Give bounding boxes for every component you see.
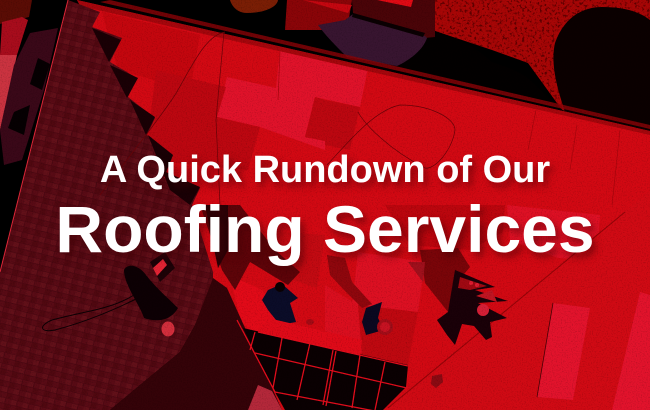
small dark stain near ridge xyxy=(431,374,443,388)
roof eave along top edge xyxy=(77,0,650,135)
worker shadow xyxy=(327,255,372,308)
lower right roof section across the ridge xyxy=(385,190,650,410)
worker in blue xyxy=(262,282,314,330)
pink panel below skylight xyxy=(248,385,282,410)
title line one: A Quick Rundown of Our xyxy=(100,149,550,191)
worker and shadow on shingles xyxy=(43,252,178,336)
seams on roof xyxy=(278,52,620,205)
mottled ground right of shed xyxy=(352,0,435,38)
neighbouring orange tree xyxy=(230,0,278,13)
dark valley lower section xyxy=(110,278,282,410)
left yard patches xyxy=(0,0,58,165)
roof lighter patches xyxy=(217,50,600,353)
trees top right xyxy=(435,0,650,130)
skylight window xyxy=(237,318,408,410)
roof darker patches xyxy=(102,12,505,365)
equipment cluster on roof xyxy=(437,270,508,345)
worker standing right xyxy=(362,302,393,335)
shaded section around ladder under title xyxy=(200,205,300,290)
tarp near house xyxy=(318,14,427,66)
hoses and cables on roof xyxy=(100,32,455,205)
title line two: Roofing Services xyxy=(55,192,595,266)
neighbouring shed xyxy=(285,0,352,30)
shingled roof plane xyxy=(0,0,213,410)
dark stepped valley triangles xyxy=(92,28,200,205)
shingle roof edge line xyxy=(0,0,68,272)
light rectangular patches lower right xyxy=(537,292,650,410)
ridge line xyxy=(388,212,625,408)
equipment shadow xyxy=(420,248,470,312)
